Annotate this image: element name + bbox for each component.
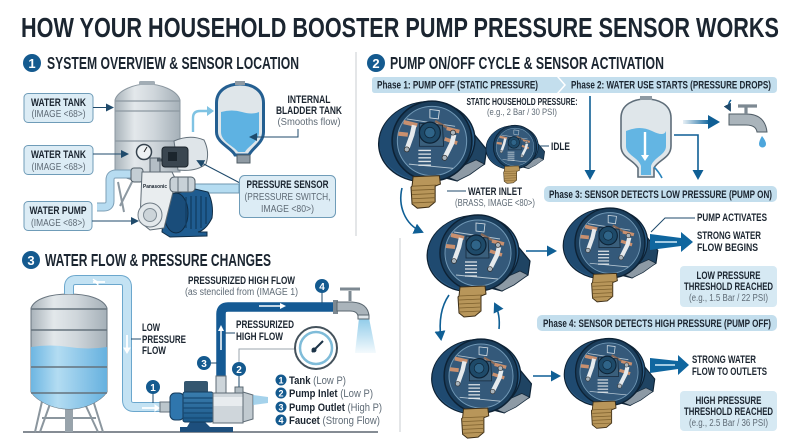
arrow: tank to bladder <box>193 111 210 132</box>
text: static pressure: (e.g., 2 Bar / 30 PSI) <box>487 107 557 118</box>
label: water inlet: WATER INLET <box>468 186 522 198</box>
label: pressurized high flow top: (as stenciled from (IMAGE 1) <box>185 287 298 298</box>
legend: Pump Outlet (High P) <box>289 402 382 414</box>
callout: internal bladder tank: (Smooths flow) <box>278 116 340 128</box>
panel: water flow <box>22 250 382 432</box>
marker 3: 3 <box>201 359 207 370</box>
heading: section 1 <box>23 53 299 73</box>
label: low pressure flow: PRESSURE <box>142 334 186 346</box>
illustration: internal bladder tank <box>216 81 264 163</box>
illustration: storage tank <box>31 294 107 432</box>
box: high pressure threshold <box>680 391 777 431</box>
phase bar: phase 1 and 2 <box>372 77 777 93</box>
text: strong water flow begins <box>697 230 761 254</box>
label: water pump <box>24 202 137 230</box>
label: water tank top: (IMAGE <68>) <box>32 109 86 120</box>
text: strong water flow begins: FLOW BEGINS <box>697 242 758 254</box>
arrow: phase 2 down <box>589 96 591 178</box>
text: strong water flow to outlets <box>692 354 767 378</box>
label: idle: IDLE <box>551 141 570 153</box>
illustration: pump assembly: Panasonic <box>143 184 167 190</box>
heading: section 2 <box>367 53 664 73</box>
label: water pump: WATER PUMP <box>30 205 86 217</box>
phase bar: phase 1 and 2: Phase 1: PUMP OFF (STATIC PRESSURE) <box>377 80 538 92</box>
phase bar: phase 4 <box>537 315 777 331</box>
icon: faucet with spray <box>333 289 376 353</box>
sensor: pump on <box>559 203 658 302</box>
marker 4 <box>315 279 329 303</box>
label: low pressure flow <box>131 322 186 357</box>
arrow: sensor to pump off <box>533 375 559 377</box>
legend: Tank (Low P) <box>289 375 346 387</box>
arrow: cycle up <box>495 304 499 329</box>
sensor: low pressure <box>422 210 530 317</box>
label: pressure sensor: IMAGE <80>) <box>261 204 314 215</box>
panel: pump cycle <box>367 53 777 438</box>
label: water pump: (IMAGE <68>) <box>31 218 85 229</box>
text: strong water flow begins: STRONG WATER <box>697 230 761 242</box>
heading: section 2: PUMP ON/OFF CYCLE & SENSOR ACTIVATION <box>390 53 664 73</box>
legend <box>276 374 382 427</box>
illustration: pump assembly <box>97 137 239 237</box>
sensor: pump off <box>560 334 655 428</box>
label: pressurized high flow vertical: PRESSURIZED <box>236 319 294 331</box>
label: pressurized high flow top: PRESSURIZED HIGH FLOW <box>188 275 295 287</box>
label: pressurized high flow top <box>185 275 298 298</box>
sensor: large idle <box>373 95 487 208</box>
label: pressurized high flow vertical <box>225 319 294 343</box>
marker 1 <box>146 380 160 403</box>
callout: internal bladder tank <box>251 94 342 137</box>
label: pressurized high flow vertical: HIGH FLOW <box>236 331 283 343</box>
arrow: sensor to pump on <box>526 250 555 252</box>
heading: section 2: 2 <box>372 56 380 71</box>
arrow: to faucet <box>683 115 720 129</box>
illustration: water tank <box>115 81 180 172</box>
arrow: bladder to phase 3 <box>674 135 698 178</box>
box: high pressure threshold: HIGH PRESSURE <box>696 395 762 407</box>
arrow: idle to low-pressure sensor <box>401 188 422 232</box>
marker 1: 1 <box>150 383 156 394</box>
panel: system overview <box>23 53 342 237</box>
pipe: low pressure <box>69 279 166 411</box>
callout: internal bladder tank: BLADDER TANK <box>276 105 342 117</box>
label: water tank top <box>24 94 112 122</box>
marker 3 <box>197 356 217 370</box>
marker 2: 2 <box>236 365 242 376</box>
arrow: cycle down <box>440 295 449 339</box>
heading: section 3 <box>22 250 271 270</box>
label: low pressure flow: LOW <box>142 322 160 334</box>
label: water tank middle: WATER TANK <box>31 149 86 161</box>
phase bar: phase 3 <box>544 186 777 202</box>
heading: section 1: 1 <box>28 56 36 71</box>
label: water inlet <box>447 186 535 209</box>
heading: section 3: WATER FLOW & PRESSURE CHANGES <box>45 250 271 270</box>
illustration: bladder draining <box>621 96 671 178</box>
arrow: strong flow begins <box>650 232 693 252</box>
box: low pressure threshold: (e.g., 1.5 Bar / 22 PSI) <box>689 293 768 304</box>
text: strong water flow to outlets: FLOW TO OUTLETS <box>692 366 767 378</box>
icon: faucet with drop <box>729 100 767 148</box>
callout: internal bladder tank: INTERNAL <box>288 94 331 106</box>
label: water tank middle <box>24 146 127 174</box>
text: static pressure <box>466 96 578 118</box>
label: water inlet: (BRASS, IMAGE <80>) <box>455 198 535 209</box>
label: pressure sensor: PRESSURE SENSOR <box>246 179 329 191</box>
legend: 2 <box>278 388 284 398</box>
illustration: booster pump <box>160 376 268 432</box>
legend: Pump Inlet (Low P) <box>289 388 373 400</box>
marker 4: 4 <box>319 282 325 293</box>
text: strong water flow to outlets: STRONG WATER <box>692 354 756 366</box>
label: water tank top: WATER TANK <box>31 97 86 109</box>
label: low pressure flow: FLOW <box>142 345 166 357</box>
callout: pump activates <box>651 212 767 232</box>
label: pressure sensor: (PRESSURE SWITCH, <box>244 192 330 203</box>
box: high pressure threshold: (e.g., 2.5 Bar / 36 PSI) <box>689 418 768 429</box>
callout: pump activates: PUMP ACTIVATES <box>697 212 767 224</box>
box: low pressure threshold: LOW PRESSURE <box>696 270 760 282</box>
text: static pressure: STATIC HOUSEHOLD PRESSURE: <box>466 96 578 108</box>
pipe: high pressure <box>218 303 334 378</box>
arrow: flow to outlets <box>650 355 689 375</box>
box: low pressure threshold <box>680 266 777 307</box>
ground line <box>23 431 378 433</box>
label: water tank middle: (IMAGE <68>) <box>32 162 86 173</box>
sensor: small idle <box>483 122 545 183</box>
legend: 3 <box>278 402 284 412</box>
heading: section 1: SYSTEM OVERVIEW & SENSOR LOCATION <box>47 53 299 73</box>
label: idle <box>539 141 570 153</box>
gauge <box>239 327 337 369</box>
heading: section 3: 3 <box>27 253 35 268</box>
legend: 1 <box>278 376 284 386</box>
legend: Faucet (Strong Flow) <box>289 415 380 427</box>
marker 2 <box>232 362 246 387</box>
legend: 4 <box>278 416 284 426</box>
label: pressure sensor <box>198 161 336 218</box>
sensor: high pressure <box>427 334 531 438</box>
